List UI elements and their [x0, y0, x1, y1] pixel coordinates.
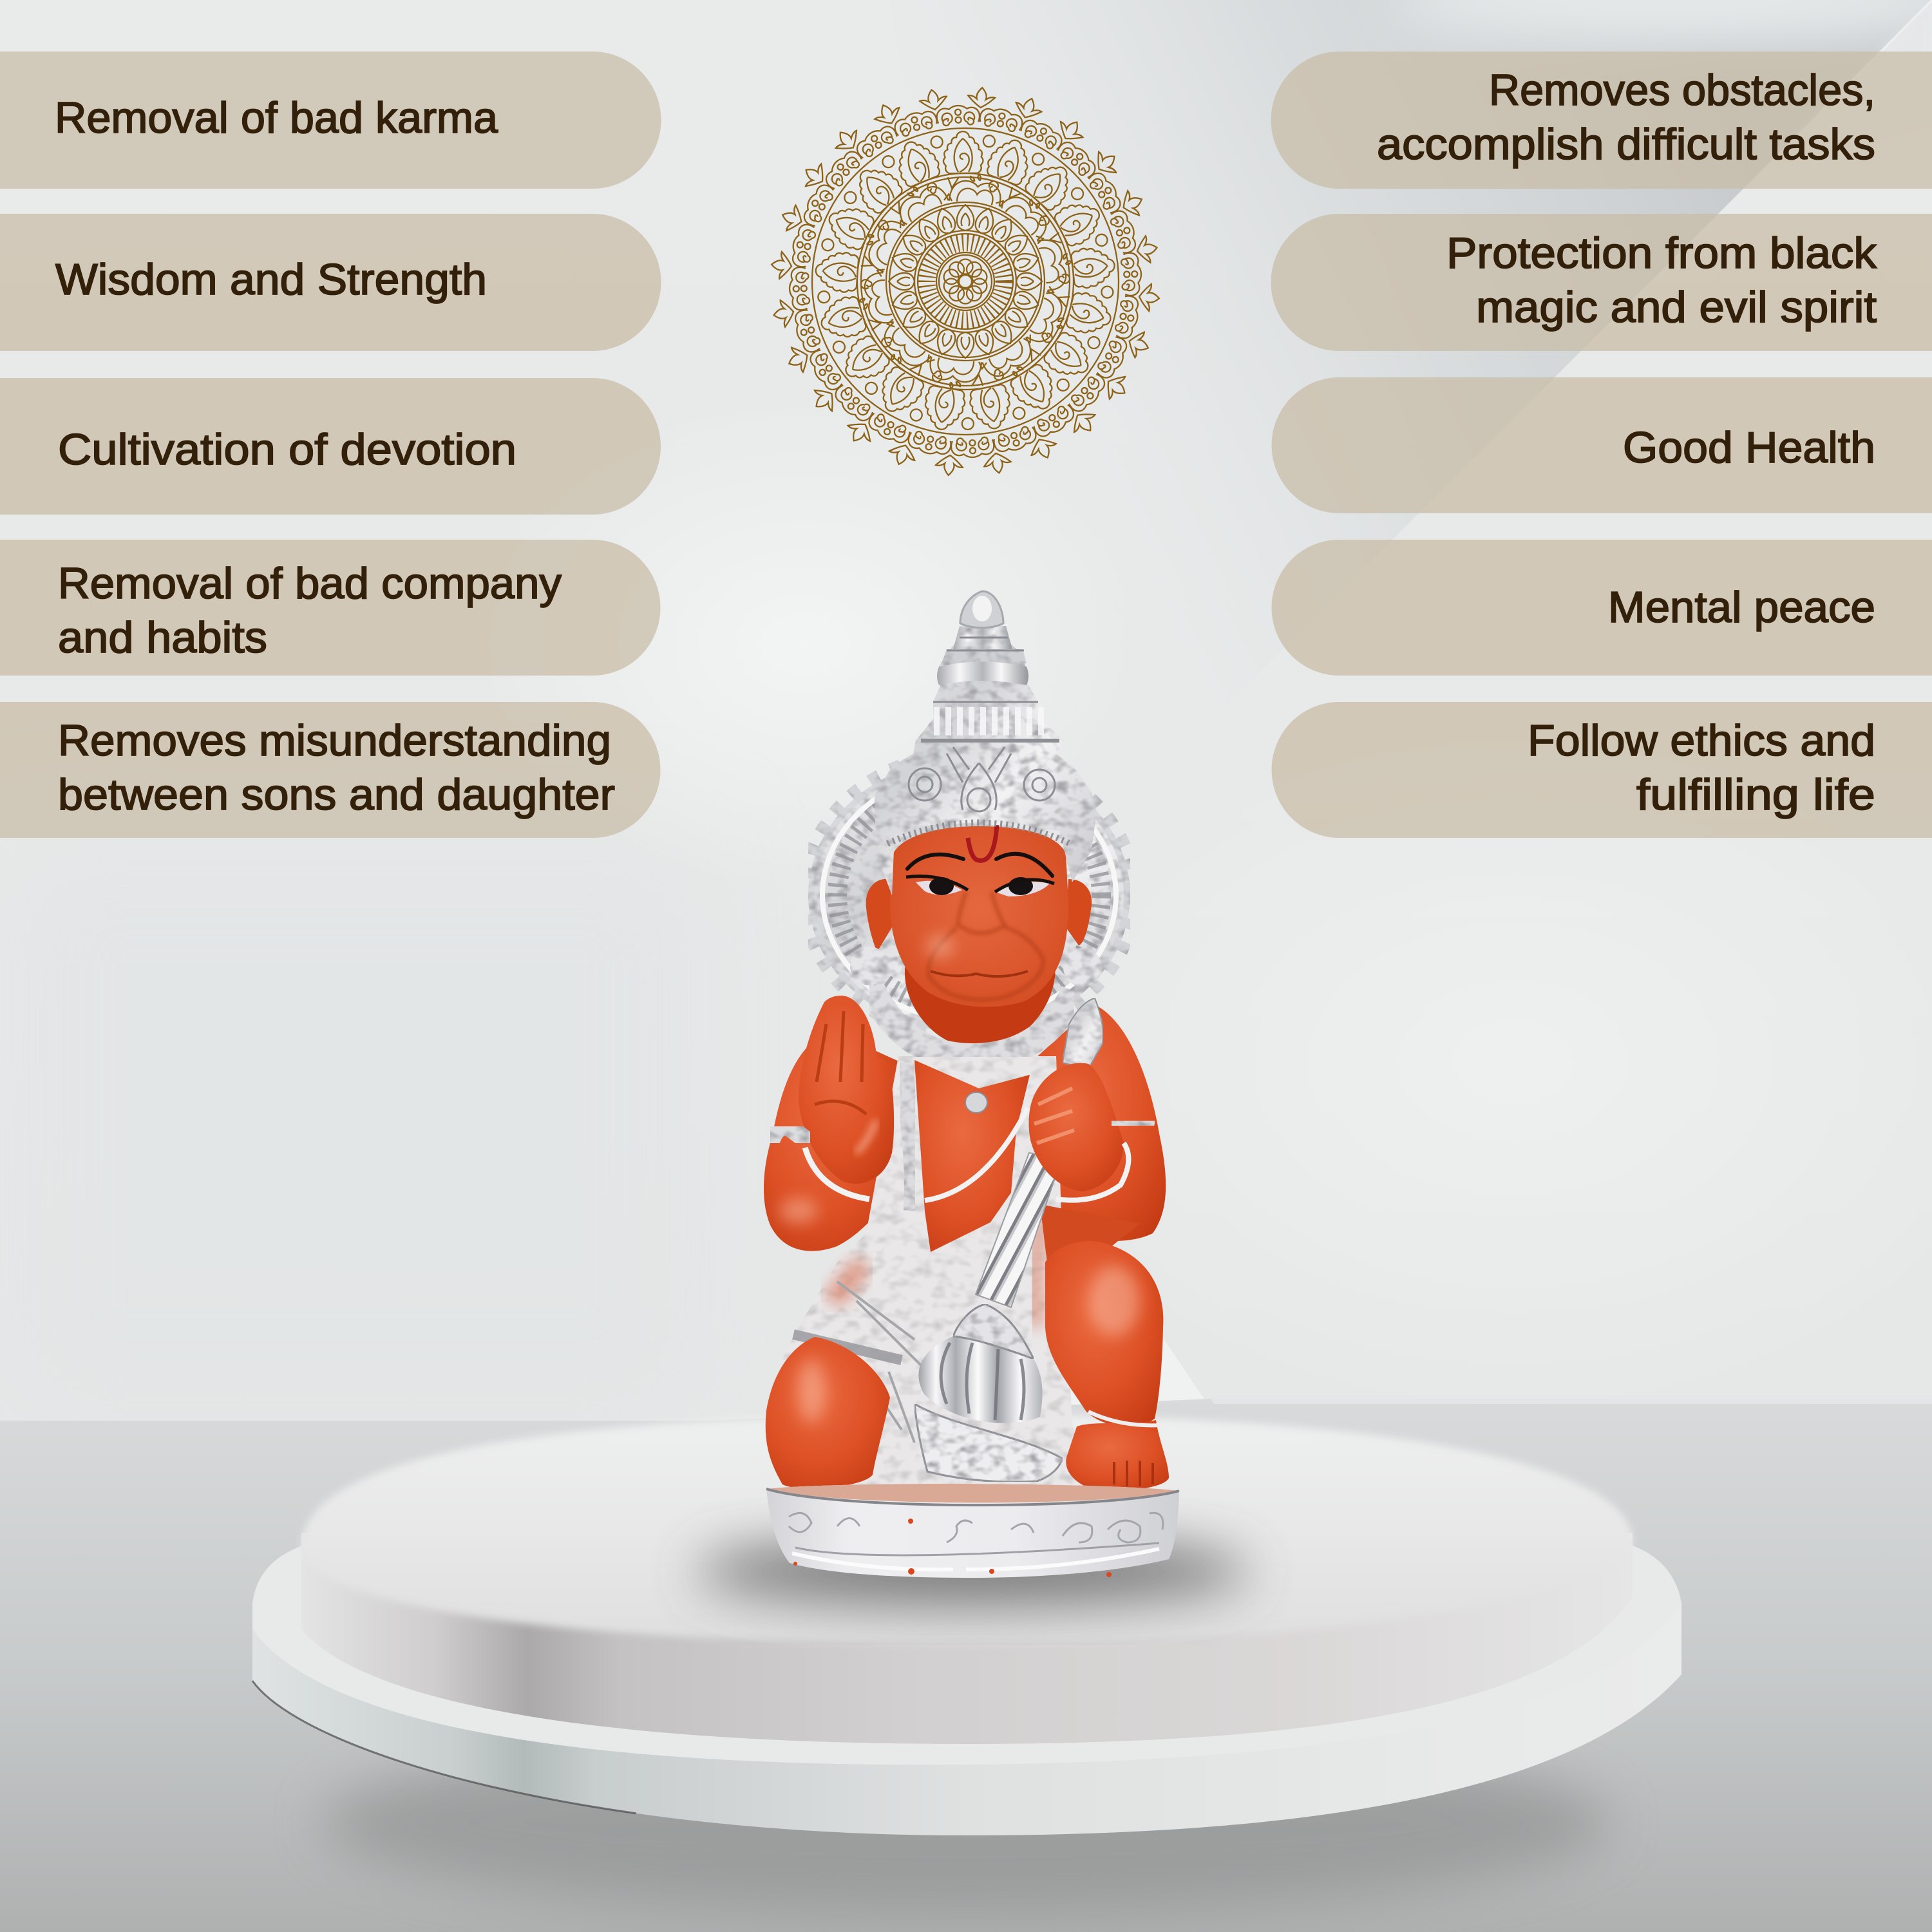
panel: Cultivation of devotion: Cultivation of devotion [58, 425, 516, 474]
side garland [900, 1063, 915, 1211]
finial [960, 591, 1003, 628]
upper disc top [301, 1414, 1633, 1643]
crown lower edge [887, 823, 1070, 844]
panel: Protection from black magic: magic and evil spirit [1476, 283, 1877, 332]
panel: Removal of bad karma [0, 52, 661, 189]
foot [1066, 1412, 1169, 1490]
mace top [1063, 998, 1103, 1069]
ears [866, 879, 1092, 952]
panel: Wisdom and Strength [0, 214, 661, 351]
dhoti shading [793, 1217, 1043, 1443]
panel: Follow ethics: Follow ethics and [1528, 716, 1875, 765]
pedestal: two stacked discs [252, 1414, 1681, 1835]
hand holding mace [1028, 1063, 1128, 1200]
base plinth [766, 1484, 1179, 1578]
plinth engraving [789, 1513, 1163, 1569]
knee, viewer left [766, 1337, 890, 1488]
panel: Removes misunderstanding between sons and daughter [0, 702, 661, 838]
highlights on orange [779, 935, 1140, 1423]
dhoti [776, 1056, 1088, 1494]
body under forearm [1040, 1204, 1140, 1285]
mace [914, 998, 1103, 1482]
chest cord [925, 1108, 1028, 1200]
pendant [965, 1092, 987, 1113]
seventeen leaves [810, 127, 1121, 438]
eyes [906, 876, 1054, 896]
arm, viewer left [764, 1030, 902, 1251]
arm, viewer right [1030, 1005, 1166, 1241]
mace head ribs [941, 1343, 1024, 1420]
halo [808, 757, 1130, 1033]
eyebrows [907, 854, 1052, 876]
mace shaft [976, 1153, 1061, 1307]
panel: Removal of bad company and habits [0, 540, 661, 676]
crown scrolls [909, 747, 1055, 811]
mace head neck band [953, 1304, 1034, 1359]
statue shadow [696, 1538, 1249, 1605]
lower disc [252, 1546, 1681, 1835]
armband left [770, 1126, 810, 1143]
contact shadow line [252, 1681, 966, 1835]
panel: Removal of bad karma: Removal of bad karma [55, 93, 498, 142]
panel: Mental peace: Mental peace [1608, 583, 1875, 632]
central flower [942, 259, 989, 304]
mace foot [914, 1404, 1063, 1482]
ten arches [843, 163, 1088, 400]
necklace [869, 985, 1074, 1057]
muzzle [929, 892, 1043, 999]
neck [905, 960, 1055, 1048]
outer fleur and paisley border [712, 28, 1218, 535]
panel: Good Health: Good Health [1623, 423, 1875, 472]
armband right [1112, 1121, 1155, 1126]
tilak [968, 823, 997, 860]
panel: Removal of bad company and habits: and habits [58, 613, 267, 662]
torso [914, 1060, 1030, 1252]
raised hand [799, 996, 894, 1199]
panel: Removes obstacles: Removes obstacles, [1489, 66, 1875, 115]
leg, viewer right [1045, 1241, 1163, 1426]
panel: Protection from black magic [1271, 214, 1932, 351]
earrings [850, 947, 1102, 987]
panel: Cultivation of devotion [0, 378, 661, 515]
mouth [931, 971, 1028, 976]
mace head [918, 1304, 1043, 1423]
panel: Wisdom and Strength: Wisdom and Strength [55, 255, 487, 304]
panel: Protection from black magic: Protection from black [1446, 229, 1877, 278]
panel: Mental peace [1272, 540, 1932, 676]
right benefits column [1271, 52, 1932, 838]
crown tiers [953, 626, 1012, 649]
statue: seated Hanuman [764, 591, 1179, 1578]
face [890, 826, 1068, 1007]
panel: Removes misunderstanding between sons and daughter: between sons and daughter [58, 770, 615, 819]
twenty petals [889, 205, 1042, 358]
panel: Follow ethics: fulfilling life [1636, 770, 1875, 819]
mandala ornament [712, 28, 1218, 535]
lower disc top surface [252, 1546, 1681, 1765]
panel: Removal of bad company and habits: Removal of bad company [58, 559, 562, 608]
upper disc side [301, 1533, 1633, 1744]
panel: Removes misunderstanding between sons and daughter: Removes misunderstanding [58, 716, 611, 765]
plinth recess [766, 1484, 1179, 1502]
crown [875, 626, 1097, 895]
panel: Removes obstacles [1271, 52, 1932, 189]
panel: Follow ethics [1272, 702, 1932, 838]
left benefits column [0, 52, 661, 838]
panel: Good Health [1272, 377, 1932, 513]
panel: Removes obstacles: accomplish difficult tasks [1377, 120, 1875, 169]
plinth specks [793, 1519, 1112, 1577]
ring circles [812, 128, 1119, 435]
radial ray ring [927, 243, 1004, 320]
